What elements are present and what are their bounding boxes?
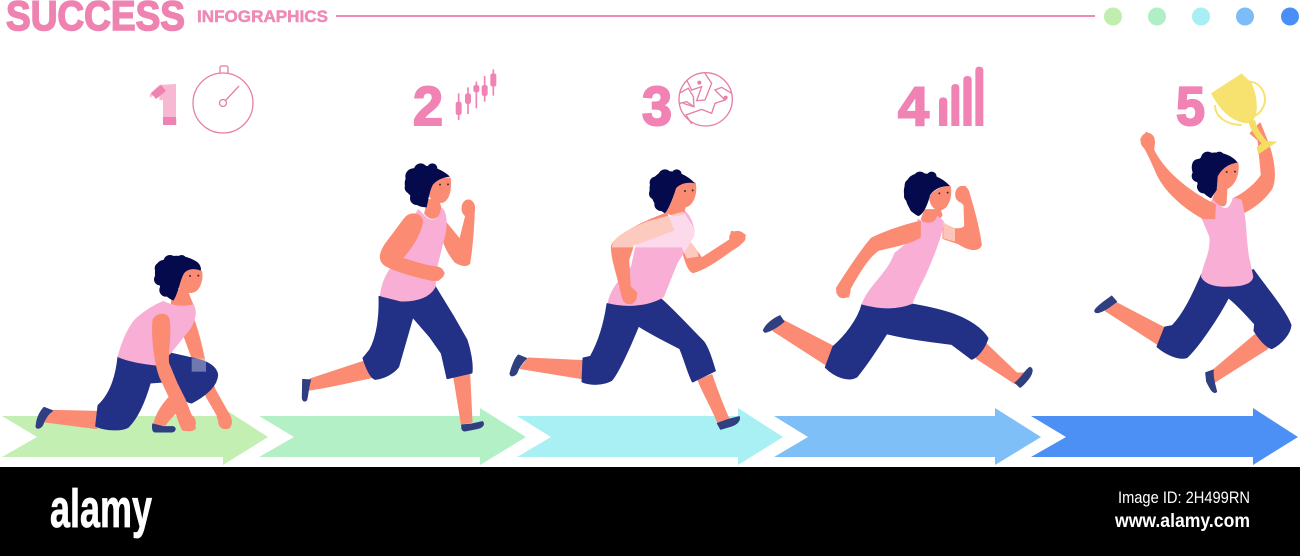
step 1 number	[150, 84, 176, 125]
runner 1: crouched start	[36, 255, 231, 432]
progress dots	[1104, 8, 1299, 26]
arrow 1	[2, 408, 268, 465]
icon: globe	[679, 73, 732, 126]
footer credits: Image ID: 2H499RN	[1118, 488, 1250, 507]
title: success infographics: INFOGRAPHICS	[197, 7, 328, 26]
arrow 3	[517, 408, 783, 465]
icon: stopwatch	[193, 66, 253, 133]
footer bar	[0, 467, 1300, 556]
step 5 number: 5	[1176, 75, 1205, 137]
runner 3: running	[510, 169, 745, 429]
step 2 number: 2	[413, 75, 443, 137]
runner 2: starting to run	[302, 163, 483, 431]
arrow 2	[259, 408, 526, 465]
footer credits: www.alamy.com	[1114, 511, 1250, 532]
arrow 5	[1031, 408, 1298, 465]
step 3 number: 3	[642, 75, 672, 137]
footer logo: alamy	[50, 479, 152, 539]
step 1 number: 1	[146, 73, 178, 138]
icon: gold trophy	[1211, 73, 1277, 154]
icon: signal bars	[939, 67, 983, 126]
footer credits	[1114, 488, 1250, 532]
runner 4: long stride	[763, 172, 1032, 387]
icon: candlestick chart	[456, 69, 496, 120]
runner 5: jumping with trophy	[1095, 123, 1291, 393]
title: success infographics	[6, 0, 328, 39]
step 4 number: 4	[898, 75, 929, 137]
arrow 4	[774, 408, 1041, 465]
